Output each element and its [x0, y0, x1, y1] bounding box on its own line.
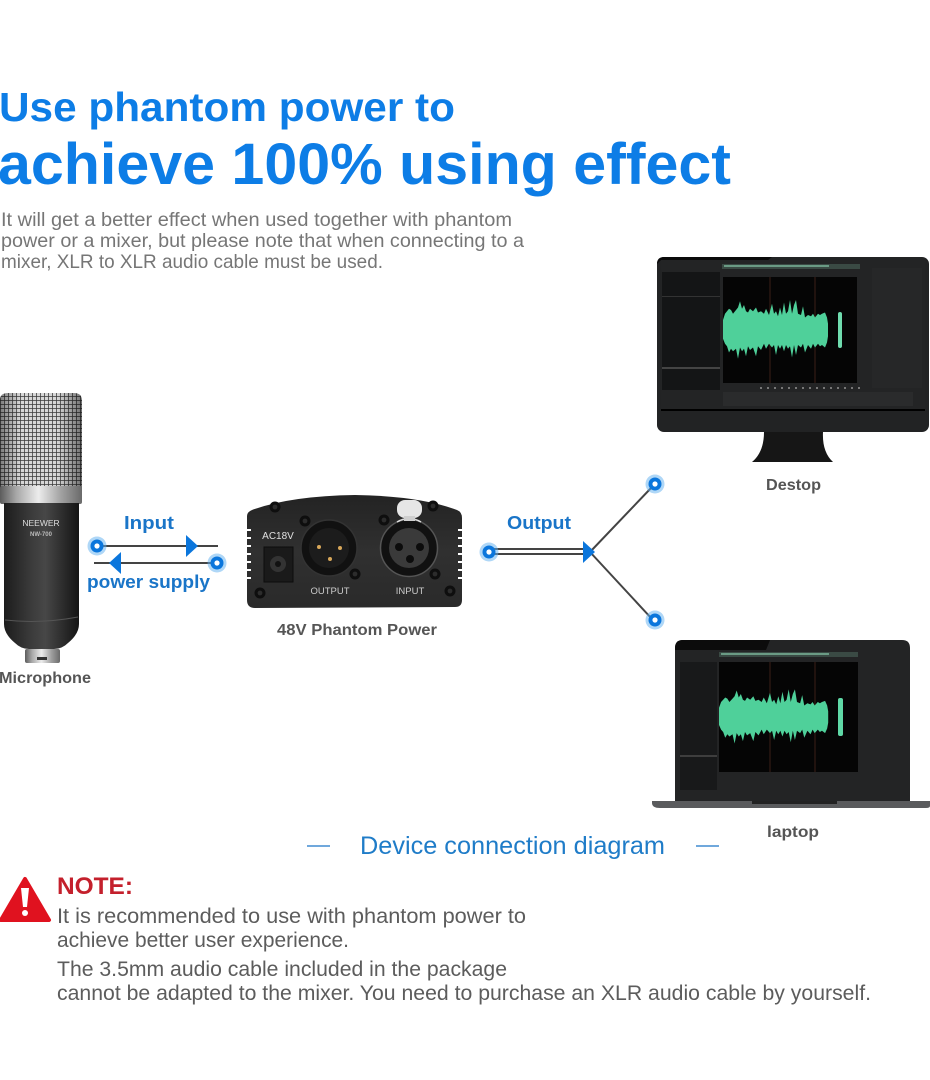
laptop side panels — [680, 662, 717, 790]
desktop monitor — [657, 257, 929, 462]
note text: cannot be adapted to the mixer. You need to purchase an XLR audio cable by yourself. — [57, 982, 871, 1005]
note text: achieve better user experience. — [57, 929, 349, 952]
laptop lid — [675, 640, 910, 801]
monitor timeline — [723, 392, 913, 406]
latch — [397, 500, 422, 518]
title — [0, 84, 731, 197]
microphone silver band — [0, 486, 82, 504]
heat fins — [247, 530, 462, 578]
microphone: NW-700 — [30, 532, 53, 538]
diagram caption: Device connection diagram — [360, 832, 665, 860]
laptop label: laptop — [767, 824, 819, 841]
monitor waveform panel — [723, 277, 857, 383]
microphone body — [4, 503, 79, 649]
input and power supply arrows — [87, 513, 226, 592]
note icon: warning triangle — [1, 879, 49, 920]
note text: The 3.5mm audio cable included in the package — [57, 958, 507, 981]
note text: It is recommended to use with phantom power to — [57, 905, 526, 928]
output arrows — [480, 474, 664, 630]
intro text: power or a mixer, but please note that when connecting to a — [1, 230, 524, 252]
monitor side panels — [662, 272, 720, 390]
microphone connector — [25, 649, 60, 663]
title: Use phantom power to — [0, 84, 455, 130]
laptop — [652, 640, 930, 808]
laptop waveform panel — [719, 662, 858, 772]
monitor stand — [752, 432, 833, 462]
laptop base — [652, 801, 930, 808]
power jack — [264, 547, 293, 582]
phantom power box — [247, 495, 462, 608]
microphone label: Microphone — [0, 670, 91, 687]
microphone grille — [0, 393, 82, 488]
phantom power label: 48V Phantom Power — [277, 622, 437, 639]
output socket — [301, 520, 357, 576]
title: achieve 100% using effect — [0, 132, 731, 197]
output label: Output — [507, 513, 571, 533]
power supply label: power supply — [87, 572, 210, 592]
laptop top bar — [719, 652, 858, 657]
phantom power box: INPUT — [396, 586, 424, 597]
input socket — [380, 518, 438, 576]
note heading: NOTE: — [57, 873, 133, 900]
box labels: AC18V — [262, 531, 294, 542]
phantom power box: OUTPUT — [310, 586, 350, 597]
monitor top bar — [722, 264, 860, 269]
microphone brand: NEEWER — [22, 518, 60, 528]
monitor frame — [657, 257, 929, 432]
intro text: It will get a better effect when used together with phantom — [1, 209, 512, 231]
input label: Input — [124, 513, 174, 533]
intro text: mixer, XLR to XLR audio cable must be used. — [1, 251, 383, 273]
microphone — [0, 393, 82, 663]
note text — [57, 905, 871, 1005]
desktop label: Destop — [766, 477, 821, 494]
screws — [270, 502, 280, 512]
intro text — [1, 209, 524, 273]
